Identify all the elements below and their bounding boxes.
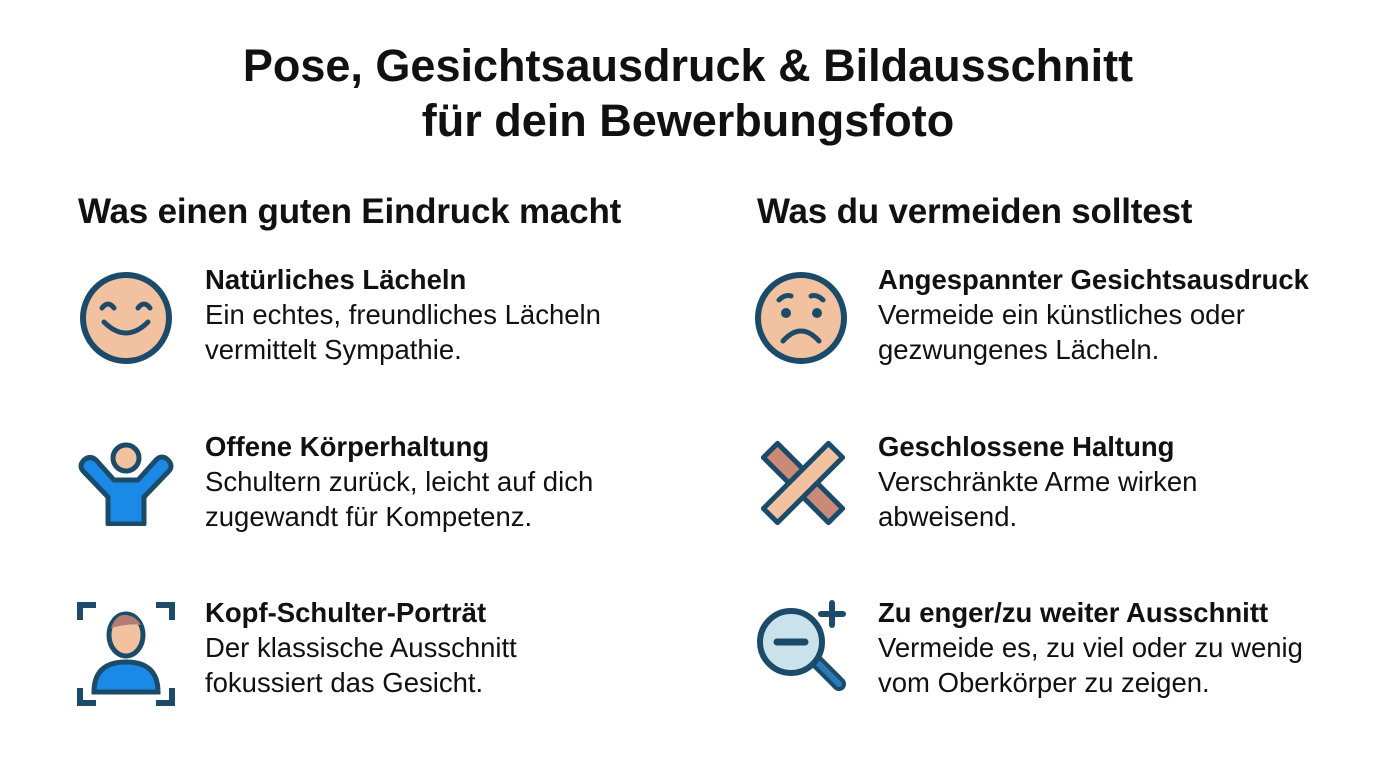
text: framing: Zu enger/zu weiter Ausschnitt <box>878 597 1268 628</box>
icon: crossed arms <box>760 440 846 526</box>
text: tense face <box>878 264 1309 365</box>
text: closed posture: Verschränkte Arme wirken <box>878 466 1197 497</box>
text: open posture: Offene Körperhaltung <box>205 431 489 462</box>
title: Pose, Gesichtsausdruck & Bildausschnitt <box>243 40 1133 91</box>
icon: portrait <box>77 602 175 706</box>
text: open posture <box>205 431 593 532</box>
title <box>243 40 1133 146</box>
text: smile <box>205 264 601 365</box>
icon: sad face <box>755 272 847 364</box>
text: smile: vermittelt Sympathie. <box>205 334 462 365</box>
text: open posture: zugewandt für Kompetenz. <box>205 501 532 532</box>
text: portrait: fokussiert das Gesicht. <box>205 667 483 698</box>
text: closed posture: Geschlossene Haltung <box>878 431 1174 462</box>
text: open posture: Schultern zurück, leicht auf dich <box>205 466 593 497</box>
icon: smile <box>80 272 172 364</box>
text: framing: vom Oberkörper zu zeigen. <box>878 667 1210 698</box>
text: portrait <box>205 597 517 698</box>
text: framing <box>878 597 1303 698</box>
text: tense face: Vermeide ein künstliches oder <box>878 299 1245 330</box>
icon: open posture <box>78 442 174 526</box>
text: framing: Vermeide es, zu viel oder zu wenig <box>878 632 1303 663</box>
text: smile: Natürliches Lächeln <box>205 264 466 295</box>
text: tense face: gezwungenes Lächeln. <box>878 334 1159 365</box>
icon: magnifier <box>757 600 846 691</box>
text: closed posture <box>878 431 1197 532</box>
text: portrait: Kopf-Schulter-Porträt <box>205 597 486 628</box>
title: für dein Bewerbungsfoto <box>422 95 954 146</box>
text: smile: Ein echtes, freundliches Lächeln <box>205 299 601 330</box>
text: closed posture: abweisend. <box>878 501 1017 532</box>
heading: good: Was einen guten Eindruck macht <box>78 192 621 231</box>
text: tense face: Angespannter Gesichtsausdruck <box>878 264 1309 295</box>
heading: avoid: Was du vermeiden solltest <box>757 192 1192 231</box>
text: portrait: Der klassische Ausschnitt <box>205 632 517 663</box>
